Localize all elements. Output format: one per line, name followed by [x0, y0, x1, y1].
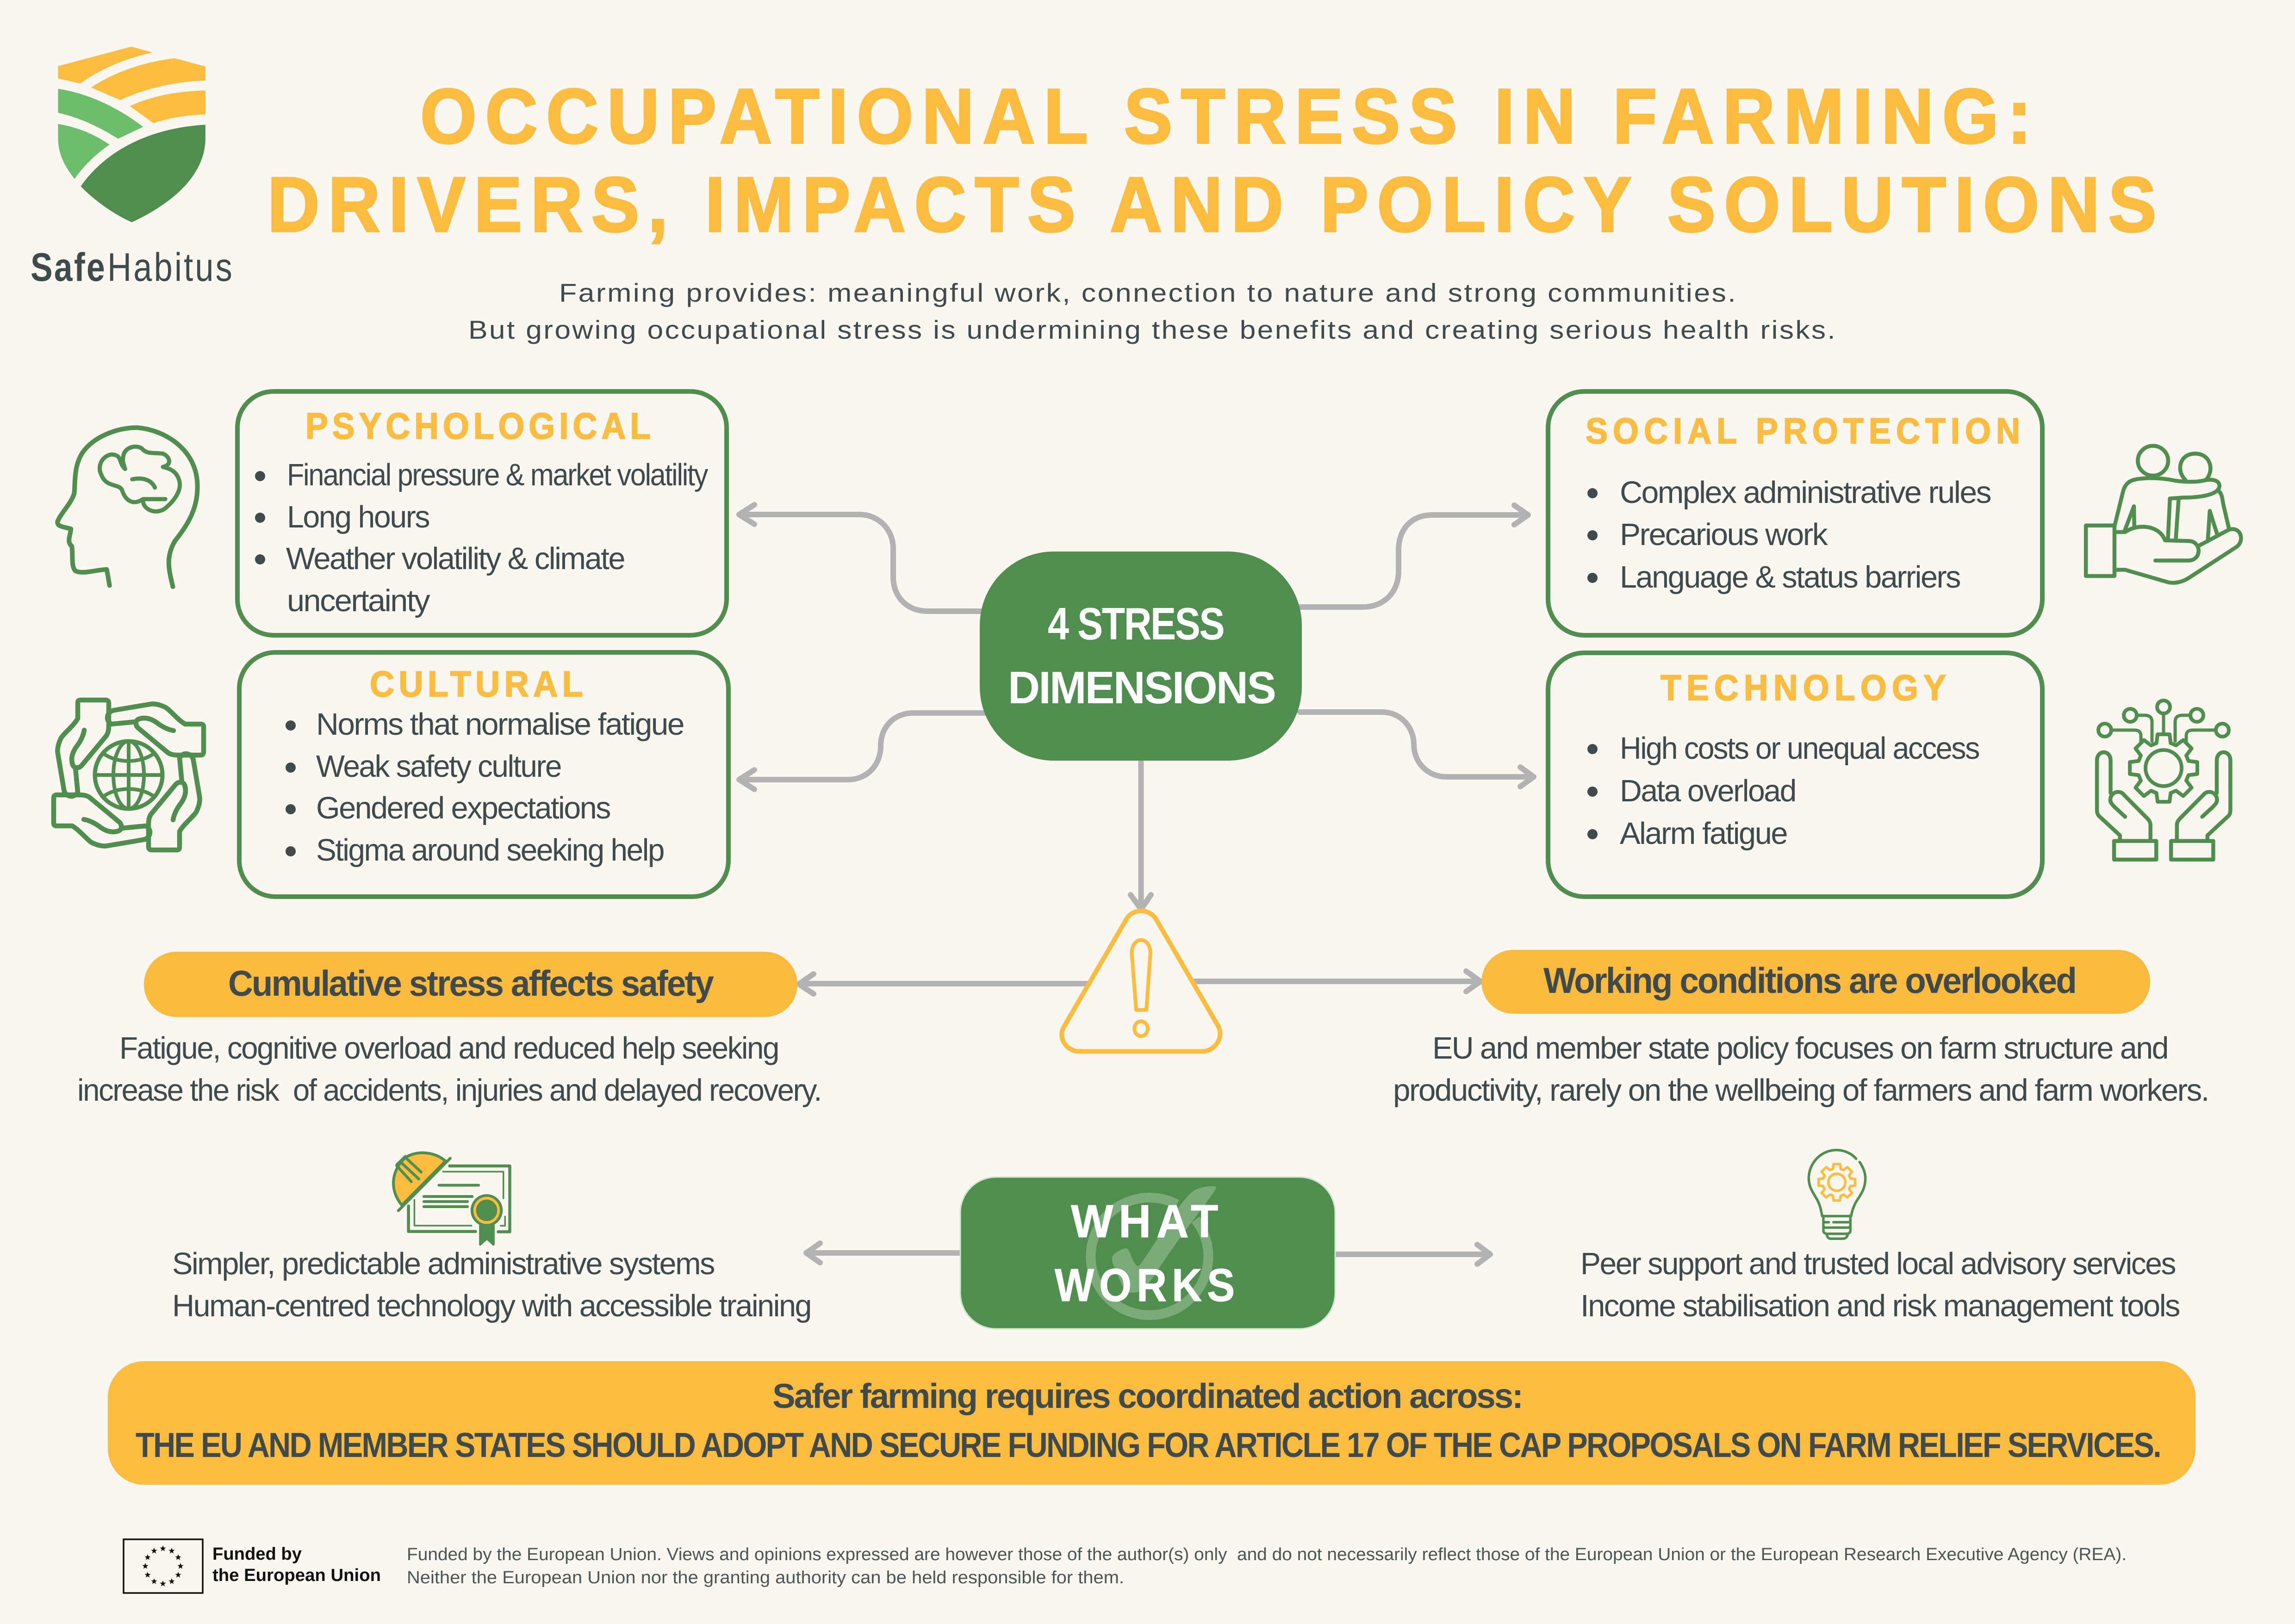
pill heading: Cumulative stress affects safety — [228, 963, 714, 1004]
panel frame — [237, 391, 727, 635]
arrow: warning to working conditions — [1194, 971, 1480, 992]
funded by label — [212, 1544, 381, 1585]
body text: increase the risk of accidents, injuries and delayed recovery. — [77, 1073, 821, 1108]
bullet list — [255, 458, 709, 618]
subtitle: But growing occupational stress is undermining these benefits and creating serious health risks. — [468, 315, 1837, 344]
logo wordmark — [31, 245, 234, 290]
banner: call to action — [108, 1361, 2195, 1485]
globe — [95, 741, 162, 809]
icon: hard hat and certificate — [393, 1153, 510, 1246]
disclaimer: Funded by the European Union. Views and opinions expressed are however those of the author(s) only and do not necessarily reflect those of the European Union or the European Research Executive Agency (REA). — [407, 1545, 2127, 1564]
text: left solutions: Simpler, predictable administrative systems — [172, 1246, 715, 1281]
panel: cultural — [239, 652, 728, 897]
funded by label: Funded by — [212, 1544, 302, 1564]
panel frame — [1548, 391, 2042, 635]
bullet list — [1587, 731, 1979, 851]
label: WORKS — [1055, 1259, 1240, 1311]
central box: 4 stress dimensions: 4 STRESS — [1048, 598, 1224, 649]
body text: EU and member state policy focuses on farm structure and — [1432, 1031, 2168, 1066]
box — [960, 1177, 1335, 1329]
bullet list: Alarm fatigue — [1620, 816, 1787, 851]
arrow: centre to warning — [1131, 762, 1151, 909]
icon: light bulb with gear — [1809, 1150, 1866, 1239]
title: DRIVERS, IMPACTS AND POLICY SOLUTIONS — [267, 161, 2165, 248]
bullet list: Language & status barriers — [1620, 560, 1960, 595]
disclaimer: Neither the European Union nor the granting authority can be held responsible for them. — [407, 1568, 1124, 1587]
text: left solutions: Human-centred technology with accessible training — [172, 1289, 811, 1323]
text: right solutions: Peer support and trusted local advisory services — [1580, 1246, 2176, 1281]
arrow: warning to safety — [799, 974, 1088, 994]
arrow: what works to left — [806, 1243, 959, 1263]
label: WHAT — [1071, 1196, 1224, 1247]
funded by label: the European Union — [212, 1566, 381, 1585]
pill heading — [1481, 950, 2150, 1014]
arrow: centre to technology — [1300, 712, 1534, 787]
arrow: what works to right — [1337, 1245, 1490, 1264]
bullet list: Gendered expectations — [316, 791, 610, 825]
bullet list: Weather volatility & climate — [286, 541, 624, 576]
central box: 4 stress dimensions — [980, 552, 1302, 761]
left hand — [2097, 752, 2156, 860]
EU flag — [124, 1539, 203, 1593]
pill heading: Working conditions are overlooked — [1543, 960, 2076, 1001]
heading: CULTURAL — [370, 663, 587, 704]
subtitle — [468, 278, 1837, 344]
body text — [1393, 1031, 2208, 1108]
right hand — [2171, 752, 2230, 860]
heading: PSYCHOLOGICAL — [305, 405, 655, 446]
bullet list: Long hours — [287, 500, 429, 534]
body text — [77, 1031, 821, 1108]
pill heading — [144, 952, 797, 1017]
subtitle: Farming provides: meaningful work, connection to nature and strong communities. — [559, 278, 1737, 307]
logo: SafeHabitus — [31, 47, 234, 290]
hands — [54, 700, 204, 850]
title — [267, 73, 2165, 248]
arrow: centre to cultural — [739, 713, 987, 789]
panel: social protection — [1548, 391, 2042, 635]
what works box — [960, 1177, 1335, 1329]
bullet list: Weak safety culture — [316, 749, 561, 784]
disclaimer — [407, 1545, 2127, 1587]
label — [1055, 1196, 1240, 1311]
bullet list: Stigma around seeking help — [316, 833, 664, 868]
bullet list: Norms that normalise fatigue — [316, 707, 684, 742]
panel frame — [239, 652, 728, 897]
EU funding logo — [124, 1539, 381, 1593]
logo wordmark: Safe — [31, 245, 106, 290]
bullet list: High costs or unequal access — [1620, 731, 1979, 766]
title: OCCUPATIONAL STRESS IN FARMING: — [420, 73, 2040, 160]
banner: call to action: Safer farming requires coordinated action across: — [772, 1376, 1522, 1415]
circuit nodes — [2098, 700, 2229, 743]
icon: hands around globe — [54, 700, 204, 850]
watermark check — [1091, 1186, 1216, 1315]
panel: psychological — [237, 391, 727, 635]
bullet list: Complex administrative rules — [1620, 475, 1991, 510]
central box: 4 stress dimensions: DIMENSIONS — [1008, 662, 1275, 713]
bullet list — [1587, 475, 1991, 595]
logo shield — [58, 47, 205, 222]
bullet list: Precarious work — [1620, 517, 1828, 552]
callout: working conditions — [1393, 950, 2208, 1108]
gear — [2130, 734, 2197, 802]
logo wordmark: Habitus — [107, 245, 234, 290]
arrow: centre to social protection — [1300, 505, 1528, 607]
icon: hands holding gear — [2097, 700, 2230, 860]
bullet list: Data overload — [1620, 774, 1796, 808]
heading: TECHNOLOGY — [1661, 667, 1951, 708]
arrow: centre to psychological — [739, 505, 980, 611]
text: right solutions: Income stabilisation and risk management tools — [1580, 1289, 2180, 1323]
panel frame — [1548, 653, 2042, 897]
bullet list: Financial pressure & market volatility — [287, 458, 709, 492]
icon: head with brain — [57, 428, 198, 587]
bullet list — [286, 707, 684, 868]
heading: SOCIAL PROTECTION — [1586, 410, 2025, 451]
panel: technology — [1548, 653, 2042, 897]
icon: people held in a hand — [2086, 446, 2241, 583]
body text: productivity, rarely on the wellbeing of farmers and farm workers. — [1393, 1073, 2208, 1108]
text: right solutions — [1580, 1246, 2180, 1323]
callout: cumulative stress — [77, 952, 821, 1108]
bullet list: uncertainty — [287, 583, 430, 618]
body text: Fatigue, cognitive overload and reduced help seeking — [119, 1031, 778, 1066]
text: left solutions — [172, 1246, 811, 1323]
icon: warning triangle — [1062, 911, 1220, 1051]
